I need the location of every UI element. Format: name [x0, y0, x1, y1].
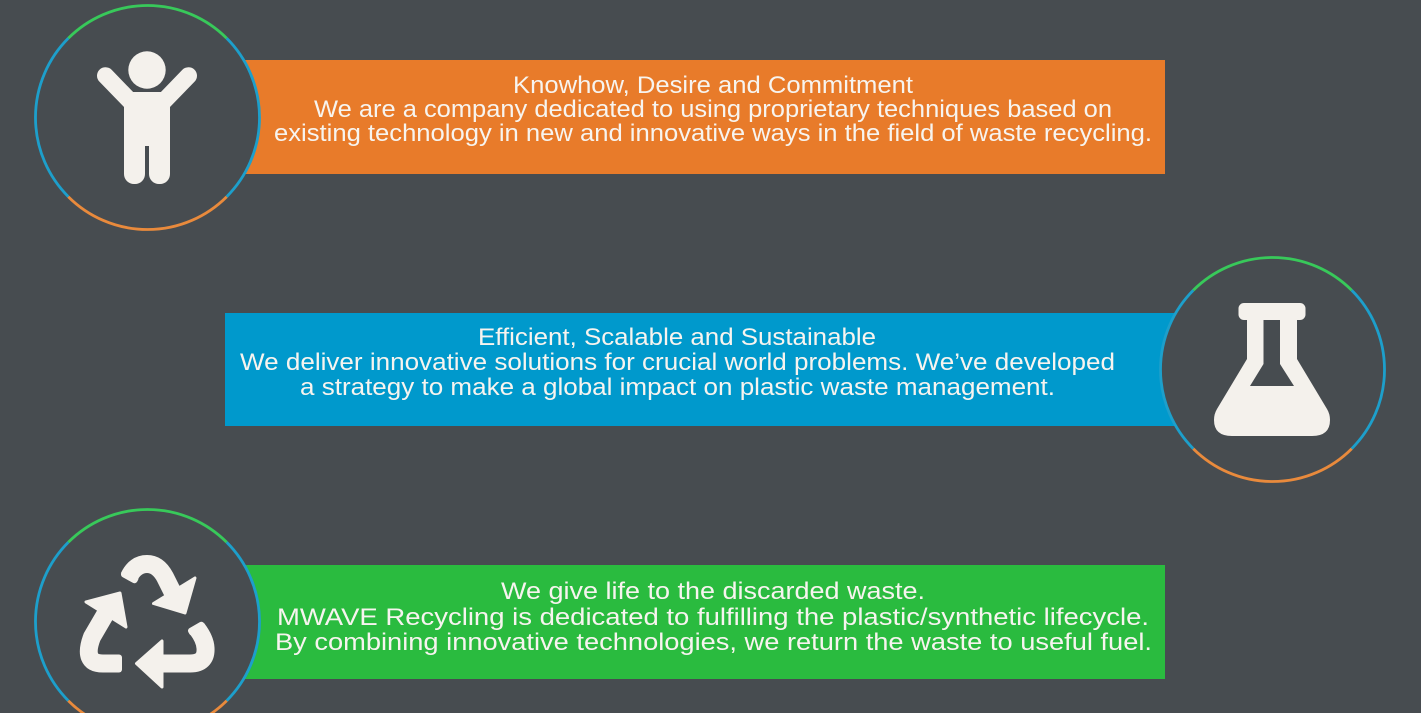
circle badge: discarded waste	[35, 509, 260, 713]
blue banner	[225, 313, 1185, 426]
banner text: efficient: We deliver innovative solutions for crucial world problems. We’ve developed	[240, 349, 1115, 376]
panel: we give life to the discarded waste	[35, 509, 1165, 713]
banner text: discarded waste: We give life to the discarded waste.	[501, 578, 925, 605]
panel: efficient, scalable and sustainable	[225, 257, 1385, 482]
icon: recycling arrows	[86, 564, 206, 687]
banner text: knowhow: We are a company dedicated to using proprietary techniques based on	[314, 96, 1112, 123]
circle badge: knowhow	[35, 5, 260, 230]
icon: laboratory flask	[1214, 303, 1330, 436]
icon: person with raised arms	[106, 51, 188, 184]
banner text: knowhow	[274, 72, 1152, 147]
banner text: efficient: a strategy to make a global impact on plastic waste management.	[300, 374, 1055, 401]
green banner	[225, 565, 1165, 679]
banner text: knowhow: existing technology in new and innovative ways in the field of waste recycling.	[274, 120, 1152, 147]
banner text: discarded waste	[275, 578, 1152, 656]
banner text: discarded waste: By combining innovative technologies, we return the waste to useful fuel.	[275, 629, 1152, 656]
orange banner	[225, 60, 1165, 174]
banner text: discarded waste: MWAVE Recycling is dedicated to fulfilling the plastic/synthetic lifecycle.	[277, 604, 1149, 631]
banner text: efficient: Efficient, Scalable and Sustainable	[478, 324, 876, 351]
panel: knowhow, desire and commitment	[35, 5, 1165, 230]
banner text: efficient	[240, 324, 1115, 401]
banner text: knowhow: Knowhow, Desire and Commitment	[513, 72, 913, 99]
circle badge: efficient	[1160, 257, 1385, 482]
